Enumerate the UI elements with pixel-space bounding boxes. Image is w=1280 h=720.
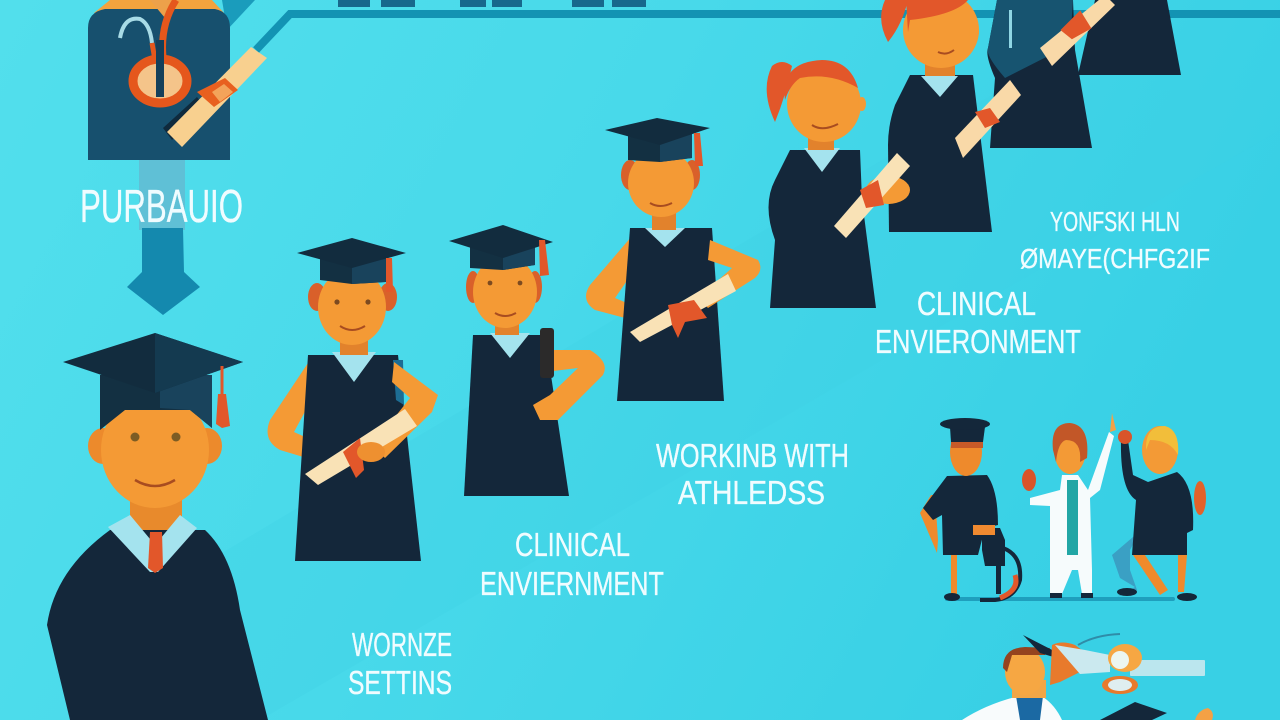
head: [101, 392, 209, 508]
ears: [88, 428, 118, 464]
person: graduate with prosthetic: [920, 418, 1020, 601]
label: WORNZE SETTINS: WORNZE: [352, 626, 452, 663]
banner line: [256, 14, 1280, 50]
graduate cap at bottom edge: [1100, 702, 1167, 720]
label: YONFSKI HLN / MAYE CHFG: [1020, 206, 1210, 274]
figure: graduate 6 with ponytail: [881, 0, 1021, 232]
label: CLINICAL ENVIERNMENT: [480, 526, 664, 602]
label: YONFSKI HLN / MAYE CHFG: YONFSKI HLN: [1050, 206, 1180, 237]
label: CLINICAL ENVIERNMENT: CLINICAL: [515, 526, 630, 563]
stethoscope: [120, 0, 187, 103]
neck: [130, 490, 182, 530]
figure: graduate 5 with ponytail: [767, 60, 910, 308]
figure: graduate 2: [268, 238, 438, 561]
label: WORNZE SETTINS: SETTINS: [348, 664, 452, 701]
figure: large graduate: [47, 333, 268, 720]
label: CLINICAL ENVIERONMENT: [875, 285, 1081, 360]
label: WORKINB WITH ATHLEDSS: WORKINB WITH: [656, 437, 849, 474]
diploma: [163, 47, 267, 147]
figure: graduate 4: [586, 118, 760, 401]
collar: [108, 515, 197, 572]
arrow down: [127, 160, 200, 315]
hand at bottom edge: [1195, 708, 1213, 720]
person: doctor in white coat: [1022, 413, 1116, 598]
tie: [148, 532, 163, 573]
robe: [47, 530, 268, 720]
label: WORNZE SETTINS: [348, 626, 452, 701]
person: blond athlete: [1112, 426, 1206, 601]
tassel: [220, 366, 224, 395]
illustration: doctor examining with diploma: [962, 634, 1205, 720]
label: WORKINB WITH ATHLEDSS: ATHLEDSS: [678, 474, 825, 511]
label: PURBAUIO: PURBAUIO: [80, 180, 243, 232]
label: CLINICAL ENVIERONMENT: CLINICAL: [917, 285, 1036, 322]
figure: graduate 3: [449, 225, 605, 496]
top banner title fragments: [338, 0, 646, 7]
label: YONFSKI HLN / MAYE CHFG: ØMAYE(CHFG2IF: [1020, 243, 1210, 274]
label: WORKINB WITH ATHLEDSS: [656, 437, 849, 511]
figure: graduate 7: [987, 0, 1115, 148]
figure: top-left graduate with stethoscope: [88, 0, 267, 160]
figure: graduate 8 robe at top right: [1078, 0, 1181, 75]
label: CLINICAL ENVIERONMENT: ENVIERONMENT: [875, 323, 1081, 360]
illustration: three professionals group: [920, 413, 1206, 601]
label: CLINICAL ENVIERNMENT: ENVIERNMENT: [480, 565, 664, 602]
cap: [100, 375, 212, 430]
